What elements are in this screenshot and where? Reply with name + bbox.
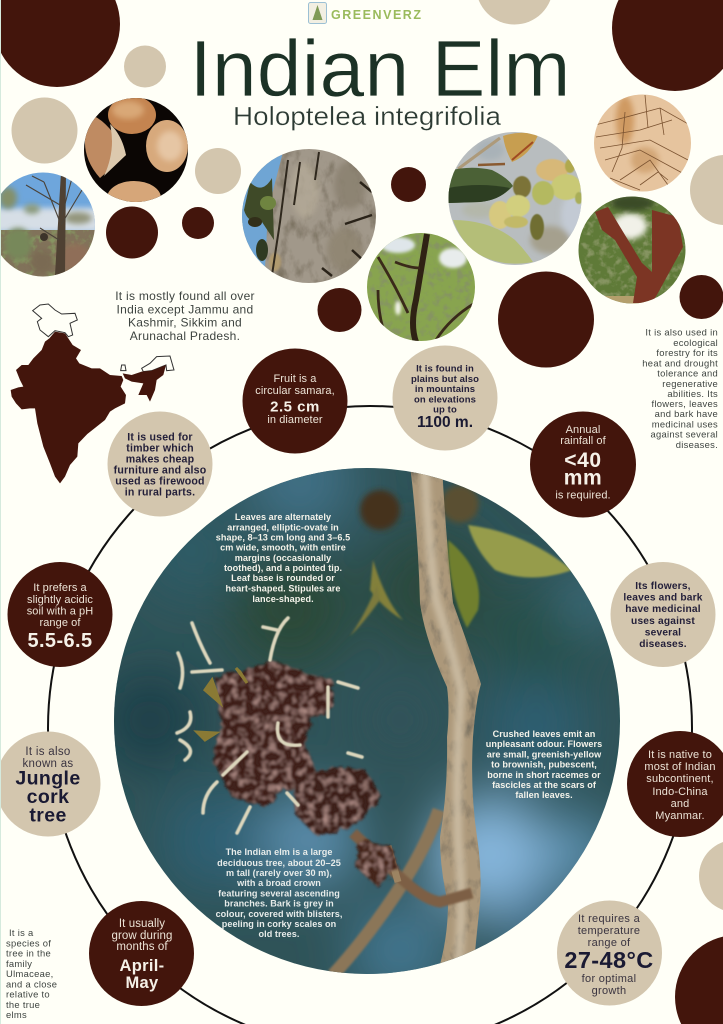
central text: tree description: featuring several ascending bbox=[218, 888, 340, 898]
central text: tree description: m tall (rarely over 30 m), bbox=[226, 868, 332, 878]
photo: red-barked tree bbox=[576, 195, 688, 306]
bubble: timber: used as firewood bbox=[115, 476, 205, 488]
twig with flower clusters bbox=[353, 833, 472, 902]
bubble: native range: most of Indian bbox=[644, 761, 716, 773]
central text: leaves: toothed), and a pointed tip. bbox=[224, 563, 342, 573]
bubble: common name: Jungle bbox=[15, 768, 81, 790]
bubble: growing months: May bbox=[126, 974, 159, 992]
bubble: medicinal uses: Its flowers, bbox=[635, 581, 691, 592]
main flower clusters bbox=[212, 660, 398, 887]
bubble: native range: Myanmar. bbox=[655, 810, 705, 822]
bubble: fruit: in diameter bbox=[267, 414, 323, 426]
bubble: timber: furniture and also bbox=[114, 464, 207, 476]
bubble: elevation: It is found in bbox=[416, 364, 474, 374]
bubble: native range bbox=[627, 731, 723, 837]
bubble: soil pH: range of bbox=[39, 617, 81, 629]
text: ecological forestry: abilities. Its bbox=[667, 388, 718, 399]
bubble: rainfall: Annual bbox=[566, 424, 600, 436]
bubble: elevation: plains but also bbox=[411, 374, 479, 385]
text: ecological forestry: and bark have bbox=[655, 408, 718, 419]
bubble: temperature: temperature bbox=[578, 925, 640, 937]
text: distribution: Kashmir, Sikkim and bbox=[128, 316, 242, 330]
text: family: species of bbox=[6, 938, 51, 948]
bubble: fruit: 2.5 cm bbox=[270, 398, 320, 416]
text: ecological forestry: flowers, leaves bbox=[651, 398, 718, 409]
central text: tree description: colour, covered with blisters, bbox=[216, 909, 342, 919]
bubble: rainfall: rainfall of bbox=[560, 435, 607, 447]
central text: leaves: Leaves are alternately bbox=[235, 512, 332, 522]
pale stamens bbox=[177, 618, 362, 833]
central text: tree description: deciduous tree, about 20–25 bbox=[217, 858, 341, 868]
photo: tree canopy bbox=[365, 232, 477, 342]
bubble: elevation: in mountains bbox=[415, 384, 475, 395]
text: ecological forestry: against several bbox=[650, 428, 718, 440]
title: Indian Elm bbox=[190, 24, 570, 113]
bubble: common name: It is also bbox=[25, 746, 71, 758]
top flower clusters bbox=[360, 485, 479, 530]
bubble: soil pH: 5.5-6.5 bbox=[27, 630, 93, 652]
bubble: native range: and bbox=[671, 798, 689, 810]
bubble: fruit: Fruit is a bbox=[274, 373, 317, 385]
bubble: temperature bbox=[557, 900, 662, 1006]
text: ecological forestry: medicinal uses bbox=[652, 418, 718, 430]
subtitle: Holoptelea integrifolia bbox=[233, 101, 502, 131]
central text: tree description: with a broad crown bbox=[236, 878, 321, 888]
text: family: elms bbox=[6, 1009, 27, 1020]
central text: flowers: unpleasant odour. Flowers bbox=[486, 739, 602, 749]
photo: cracked wood bbox=[592, 92, 694, 194]
central text: flowers: fascicles at the scars of bbox=[492, 780, 597, 790]
central text: tree description: The Indian elm is a large bbox=[226, 847, 332, 857]
central text: flowers: are small, greenish-yellow bbox=[487, 750, 602, 760]
text: distribution: It is mostly found all over bbox=[115, 289, 255, 303]
central text: leaves: shape, 8–13 cm long and 3–6.5 bbox=[216, 532, 350, 542]
photo: fruit and leaves bbox=[448, 132, 582, 265]
bubble: elevation bbox=[392, 346, 498, 450]
central text: leaves: cm wide, smooth, with entire bbox=[220, 542, 346, 552]
map: India bbox=[11, 304, 174, 483]
text: distribution: India except Jammu and bbox=[117, 302, 253, 316]
central text: flowers: to brownish, pubescent, bbox=[491, 760, 597, 770]
bubble: soil pH bbox=[8, 562, 112, 667]
bubble: fruit: circular samara, bbox=[255, 385, 335, 397]
text: ecological forestry: tolerance and bbox=[657, 368, 718, 378]
bubble: rainfall bbox=[530, 412, 636, 518]
bubble: medicinal uses: several bbox=[645, 628, 681, 638]
bubble: common name: known as bbox=[23, 758, 73, 770]
bubble: timber: timber which bbox=[126, 442, 194, 454]
central text: leaves: heart-shaped. Stipules are bbox=[225, 584, 341, 594]
bubble: native range: subcontinent, bbox=[646, 773, 714, 785]
secondary branch bbox=[333, 810, 439, 975]
bubble: growing months: It usually bbox=[119, 918, 165, 930]
main stem bbox=[410, 465, 481, 975]
bubble: common name: cork bbox=[27, 786, 69, 808]
text: family: tree in the bbox=[6, 948, 51, 958]
central text: leaves: Leaf base is rounded or bbox=[231, 573, 335, 583]
bubble: elevation: up to bbox=[433, 404, 457, 416]
bubble: elevation: 1100 m. bbox=[417, 414, 473, 431]
bubble: soil pH: soil with a pH bbox=[27, 606, 93, 618]
central text: flowers: borne in short racemes or bbox=[487, 770, 601, 780]
bubble: growing months: April- bbox=[120, 957, 164, 975]
text: family: relative to bbox=[6, 988, 50, 1000]
central photo: elm twig with flowers bbox=[114, 468, 620, 974]
bubble: temperature: growth bbox=[592, 985, 626, 997]
central text: tree description: peeling in corky scales on bbox=[222, 919, 336, 929]
text: family: Ulmaceae, bbox=[6, 968, 54, 979]
ring connecting the fact bubbles bbox=[48, 406, 692, 1024]
bubble: medicinal uses: diseases. bbox=[639, 639, 687, 650]
bubble: timber: It is used for bbox=[127, 432, 193, 444]
bubble: medicinal uses bbox=[610, 562, 716, 667]
text: family: the true bbox=[6, 999, 40, 1010]
bubble: soil pH: slightly acidic bbox=[27, 594, 93, 606]
bubble: fruit bbox=[242, 348, 348, 454]
bubble: growing months: months of bbox=[116, 941, 168, 953]
central text: flowers: fallen leaves. bbox=[515, 790, 573, 800]
logo: Greenverz bbox=[308, 2, 421, 24]
central text: tree description: old trees. bbox=[259, 929, 299, 939]
photo: bark close-up bbox=[240, 148, 380, 288]
bubble: medicinal uses: uses against bbox=[631, 616, 695, 627]
photo: log ends bbox=[84, 98, 188, 202]
left edge tint bbox=[0, 0, 1, 1024]
central text: leaves: lance-shaped. bbox=[252, 594, 314, 604]
text: ecological forestry: regenerative bbox=[662, 378, 718, 389]
central text: flowers: Crushed leaves emit an bbox=[493, 729, 595, 739]
central text: tree description: branches. Bark is grey in bbox=[224, 898, 334, 908]
bubble: growing months: grow during bbox=[112, 930, 172, 942]
central text: leaves: arranged, elliptic-ovate in bbox=[227, 522, 339, 532]
leaves bbox=[468, 525, 572, 578]
text: ecological forestry: ecological bbox=[673, 337, 718, 348]
bubble: elevation: on elevations bbox=[414, 394, 476, 405]
bubble: medicinal uses: leaves and bark bbox=[623, 592, 703, 604]
bubble: rainfall: mm bbox=[564, 466, 602, 490]
small olive sepals bbox=[197, 668, 247, 740]
bubble: native range: Indo-China bbox=[652, 786, 708, 798]
text: distribution: Arunachal Pradesh. bbox=[130, 329, 240, 343]
text: family: It is a bbox=[9, 927, 34, 938]
photo: tree against the sky bbox=[1, 172, 95, 276]
text: family: and a close bbox=[6, 978, 57, 990]
text: ecological forestry: diseases. bbox=[676, 439, 718, 450]
logo: Greenverz: GREENVERZ bbox=[331, 8, 421, 22]
bubble: common name: tree bbox=[29, 804, 67, 826]
bubble: rainfall: is required. bbox=[555, 490, 611, 502]
bubble: timber bbox=[108, 412, 212, 516]
bubble: medicinal uses: have medicinal bbox=[625, 604, 701, 615]
text: ecological forestry: heat and drought bbox=[642, 358, 718, 368]
bubble: temperature: range of bbox=[588, 937, 631, 949]
bubble: rainfall: <40 bbox=[564, 449, 602, 472]
central text: leaves: margins (occasionally bbox=[235, 553, 332, 563]
bubble: soil pH: It prefers a bbox=[33, 582, 88, 594]
bubble: timber: makes cheap bbox=[126, 454, 195, 466]
text: family: family bbox=[6, 958, 32, 969]
bubble: temperature: It requires a bbox=[578, 913, 641, 925]
bubble: timber: in rural parts. bbox=[125, 486, 195, 498]
bubble: growing months bbox=[89, 901, 194, 1006]
bubble: temperature: for optimal bbox=[582, 973, 636, 985]
text: ecological forestry: forestry for its bbox=[656, 347, 718, 358]
bubble: temperature: 27-48°C bbox=[564, 947, 654, 973]
text: ecological forestry: It is also used in bbox=[645, 326, 718, 338]
bubble: native range: It is native to bbox=[648, 749, 712, 761]
bubble: common name bbox=[0, 732, 100, 836]
